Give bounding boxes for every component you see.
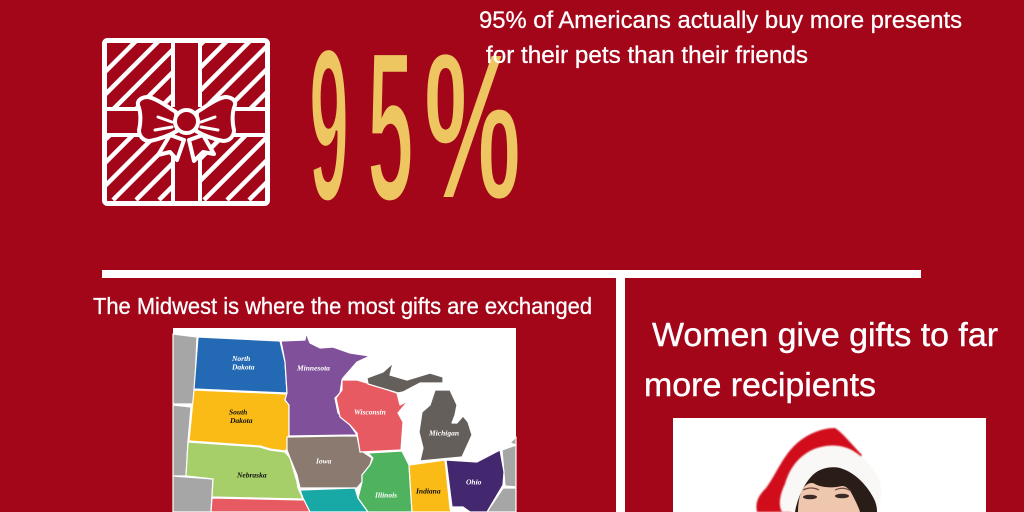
eyes (803, 495, 817, 499)
hair (795, 467, 877, 512)
text: pets statistic: for their pets than their friends (486, 42, 808, 69)
state: North Dakota (194, 337, 287, 393)
state labels: Illinois (374, 490, 397, 500)
state labels: Nebraska (236, 470, 267, 480)
state labels: Dakota (229, 416, 253, 425)
state labels: Iowa (315, 456, 332, 466)
state: Michigan (367, 363, 472, 461)
state: Missouri (300, 488, 368, 512)
heading: Midwest: The Midwest is where the most gifts are exchanged (93, 293, 592, 319)
big statistic: 95%: 9 (309, 2, 349, 248)
text: pets statistic: 95% of Americans actually buy more presents (479, 7, 962, 34)
text: pets statistic (479, 7, 962, 69)
state: Indiana (409, 460, 451, 512)
heading: women give gifts (644, 316, 998, 403)
state labels (229, 354, 482, 500)
icon: gift box with bow (102, 38, 270, 206)
state: Minnesota (281, 333, 370, 436)
state: Kansas (211, 498, 310, 512)
state labels: North (231, 354, 250, 363)
state: Illinois (358, 451, 412, 512)
map: Midwest states (173, 328, 516, 512)
heading: women give gifts: Women give gifts to far (652, 316, 998, 353)
big statistic: 95% (309, 2, 521, 248)
state: Nebraska (186, 442, 303, 499)
state: Ohio (446, 450, 504, 512)
state: South Dakota (189, 390, 289, 451)
face (798, 483, 860, 512)
grey neighbouring states (173, 334, 516, 512)
big statistic: 95%: 5 (367, 6, 414, 247)
state: Iowa (287, 436, 372, 488)
heading: women give gifts: more recipients (644, 366, 876, 403)
state labels: South (229, 408, 247, 416)
big statistic: 95%: % (424, 11, 521, 243)
santa hat (756, 428, 862, 512)
photo: woman in Santa hat (673, 418, 986, 512)
state labels: Michigan (428, 428, 459, 438)
state labels: Ohio (466, 478, 482, 486)
state labels: Dakota (231, 362, 255, 372)
state labels: Wisconsin (354, 408, 386, 416)
state labels: Indiana (415, 486, 441, 496)
state: Wisconsin (336, 380, 408, 452)
state labels: Minnesota (296, 364, 330, 372)
